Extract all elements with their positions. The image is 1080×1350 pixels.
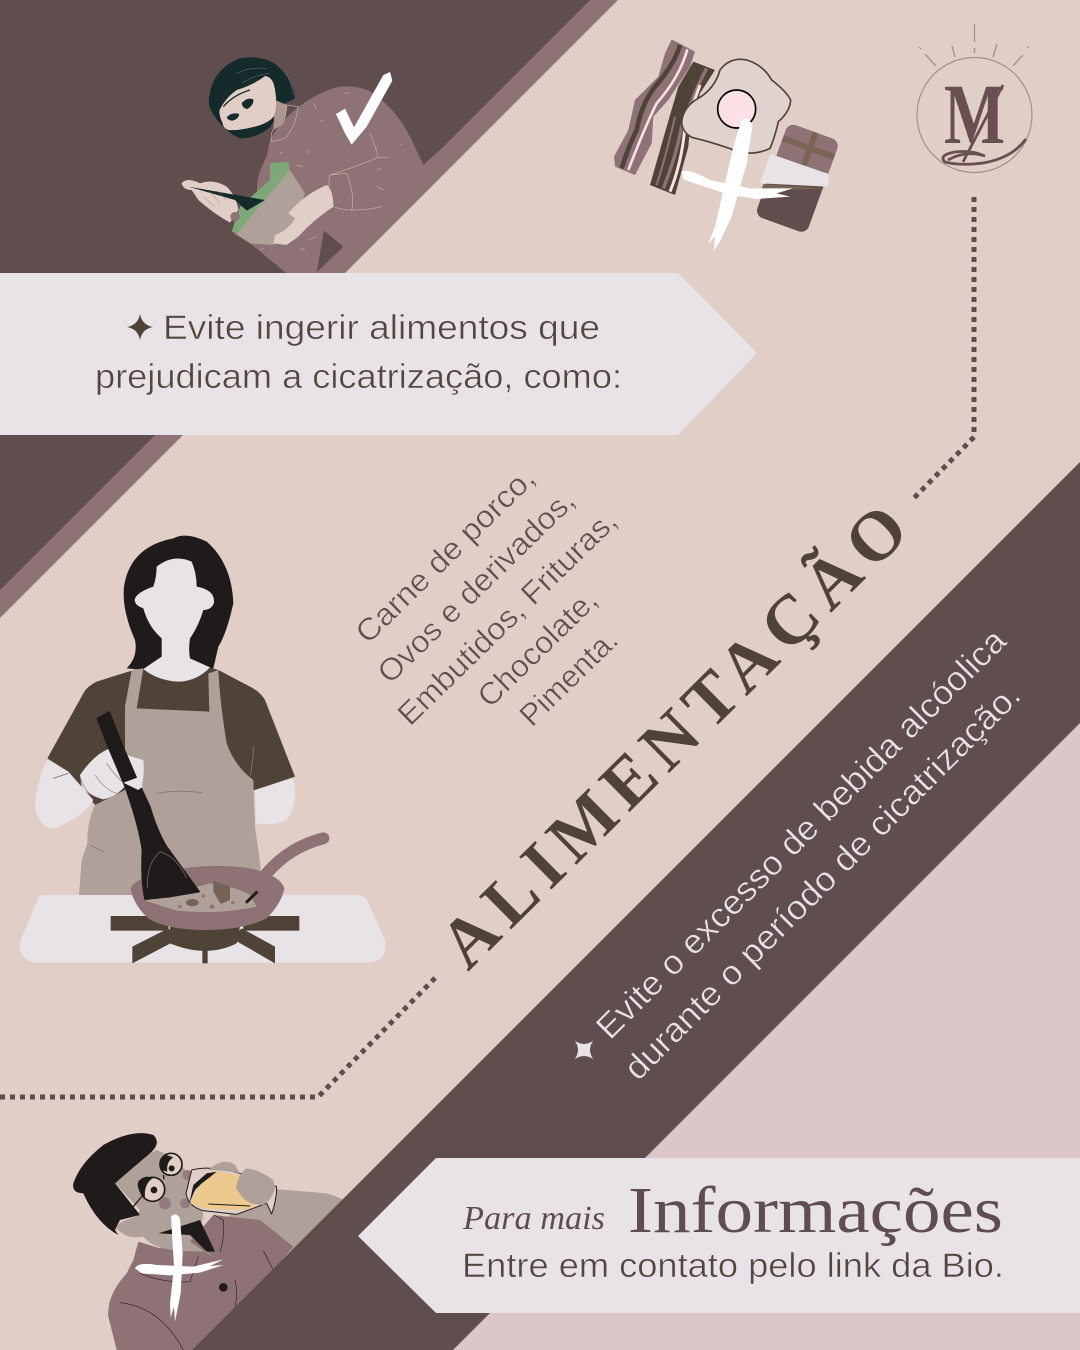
burner [111,916,299,963]
text: contact link: Entre em contato pelo link da Bio. [462,1247,1004,1285]
alcohol warning text: durante o período de cicatrização. [617,676,1028,1088]
food list rotated text: Carne de porco, [348,460,542,650]
icon: white cross [682,118,793,252]
dotted connector: top right [912,197,974,500]
alcohol warning text: Evite o excesso de bebida alcóolica [589,622,1014,1047]
hair [73,1133,157,1235]
frying pan [131,838,323,930]
lower-right pink panel [453,723,1080,1350]
illustration: man drinking with cross [73,1133,360,1350]
glasses [133,1153,182,1207]
apron [79,668,261,895]
chocolate bar [755,123,840,234]
right arm [255,778,295,824]
icon: sparkle [566,1032,602,1068]
banner text [95,309,622,396]
jacket [108,1215,293,1350]
dotted connector: bottom left [0,975,438,1097]
food list rotated text: Pimenta. [512,622,625,733]
icon: white cross [135,1215,223,1322]
raised arm [227,1187,360,1277]
shirt [47,667,295,805]
bacon strips [614,39,715,195]
illustration: woman eating salad with check mark [182,57,440,273]
food list rotated text: Chocolate, [470,582,604,714]
head [115,1150,215,1258]
text: Para mais: Para mais [462,1200,605,1237]
fried egg [682,59,791,153]
face and neck [135,558,214,682]
heading: Informações: Informações [628,1174,1003,1247]
food list rotated text: Embutidos, Frituras, [390,503,624,732]
logo: M monogram in circle with rays: M [944,66,1005,162]
illustration: woman cooking at stove [20,536,386,963]
icon: sparkle [127,314,153,340]
glass of drink [186,1162,277,1214]
stove top [20,895,386,963]
logo: M monogram in circle with rays [917,24,1032,172]
banner text: Evite ingerir alimentos que [163,309,600,347]
left arm and hand [35,760,93,829]
top-left diagonal panel [0,0,618,618]
food list rotated text: Ovos e derivados, [370,483,582,690]
banner: contact information [358,1158,1080,1313]
icon: white check mark [336,72,392,145]
hair [124,536,233,670]
food list rotated text [348,460,625,733]
illustration: forbidden food with cross [614,39,840,252]
banner text: prejudicam a cicatrização, como: [95,358,622,396]
title: ALIMENTAÇÃO: ALIMENTAÇÃO [425,490,923,983]
dark diagonal band [192,462,1080,1350]
banner: avoid foods [0,273,757,435]
spatula and hand [80,712,199,899]
